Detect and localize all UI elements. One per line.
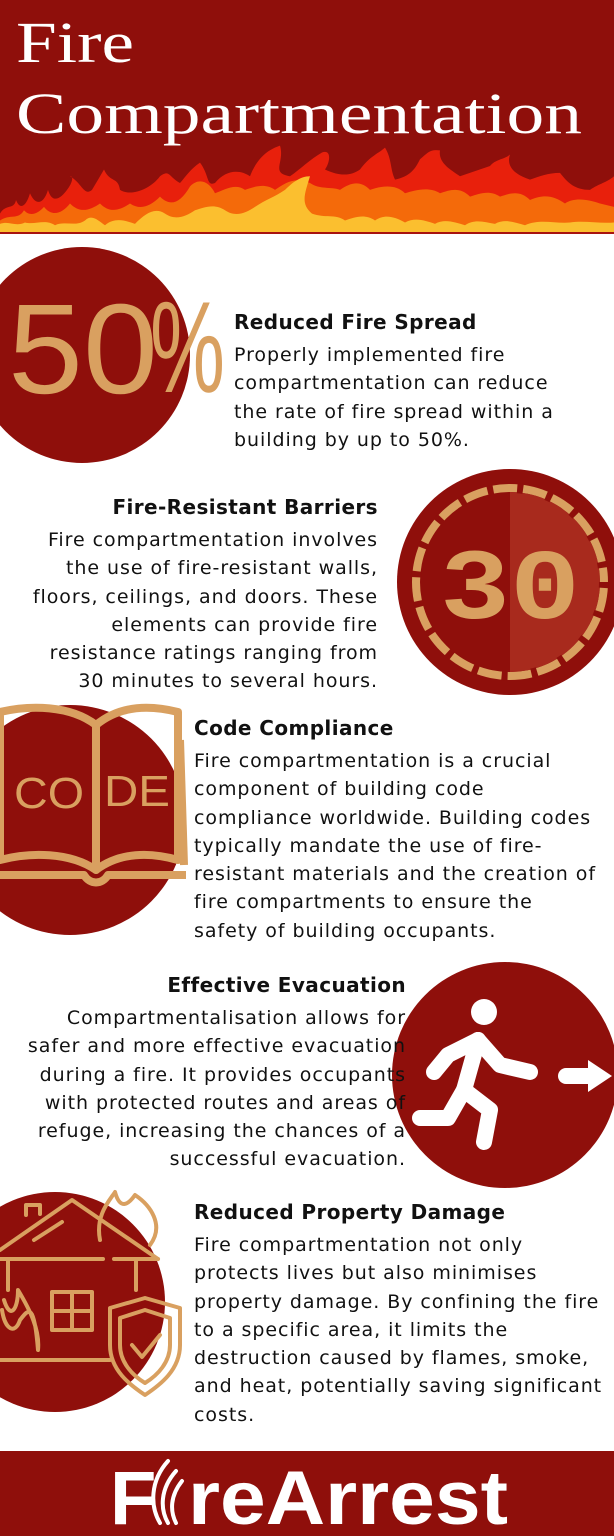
text: effective evacuation: during a fire. It provides occupants xyxy=(40,1064,406,1086)
text: code compliance: compliance worldwide. Building codes xyxy=(194,807,591,829)
text: effective evacuation: safer and more effective evacuation xyxy=(28,1035,406,1057)
header xyxy=(0,0,614,234)
text: fire-resistant barriers xyxy=(33,495,378,692)
text: reduced property damage: Reduced Property Damage xyxy=(194,1200,505,1224)
text: code compliance: typically mandate the use of fire- xyxy=(194,835,542,857)
text: fire-resistant barriers: floors, ceilings, and doors. These xyxy=(33,586,378,608)
title xyxy=(16,10,582,146)
icon: 30 minutes badge xyxy=(397,469,614,695)
title: Compartmentation xyxy=(16,81,582,146)
text: fire-resistant barriers: Fire compartmentation involves xyxy=(48,529,378,551)
icon: code book: DE xyxy=(104,767,170,816)
text: reduced fire spread: Properly implemented fire xyxy=(234,344,505,366)
text: reduced fire spread: building by up to 50%. xyxy=(234,429,470,451)
icon: 30 minutes badge: 30 xyxy=(440,536,580,649)
text: fire-resistant barriers: the use of fire-resistant walls, xyxy=(66,557,378,579)
text: reduced property damage: to a specific area, it limits the xyxy=(194,1319,508,1341)
text: code compliance: component of building code xyxy=(194,778,485,800)
icon: 50% circle xyxy=(0,247,225,463)
text: reduced property damage: destruction caused by flames, smoke, xyxy=(194,1347,589,1369)
icon: 50% circle: % xyxy=(150,274,225,420)
text: effective evacuation: Effective Evacuation xyxy=(167,973,406,997)
icon: 50% circle: 50 xyxy=(8,278,158,421)
text: fire-resistant barriers: resistance ratings ranging from xyxy=(50,642,378,664)
text: reduced fire spread: the rate of fire spread within a xyxy=(234,401,554,423)
flames xyxy=(0,146,614,232)
text: code compliance: Fire compartmentation is a crucial xyxy=(194,750,551,772)
text: fire-resistant barriers: elements can provide fire xyxy=(111,614,378,636)
footer logo xyxy=(0,1451,614,1536)
icon: house with shield xyxy=(0,1192,180,1412)
icon: code book xyxy=(0,705,186,935)
text: effective evacuation: refuge, increasing the chances of a xyxy=(38,1120,406,1142)
text: reduced property damage: costs. xyxy=(194,1404,255,1426)
text: reduced property damage xyxy=(194,1200,602,1426)
text: reduced property damage: Fire compartmentation not only xyxy=(194,1234,523,1256)
text: code compliance: safety of building occupants. xyxy=(194,920,496,942)
text: effective evacuation: Compartmentalisation allows for xyxy=(67,1007,406,1029)
text: code compliance xyxy=(194,716,596,942)
text: effective evacuation: with protected routes and areas of xyxy=(45,1092,406,1114)
text: fire-resistant barriers: Fire-Resistant Barriers xyxy=(112,495,378,519)
text: reduced fire spread: compartmentation can reduce xyxy=(234,372,548,394)
text: effective evacuation: successful evacuation. xyxy=(170,1148,406,1170)
text: code compliance: fire compartments to ensure the xyxy=(194,891,533,913)
text: code compliance: Code Compliance xyxy=(194,716,394,740)
text: fire-resistant barriers: 30 minutes to several hours. xyxy=(78,670,378,692)
icon: code book: CO xyxy=(14,769,84,818)
text: effective evacuation xyxy=(28,973,406,1170)
text: reduced property damage: property damage. By confining the fire xyxy=(194,1291,599,1313)
text: reduced property damage: and heat, potentially saving significant xyxy=(194,1375,602,1397)
text: reduced property damage: protects lives but also minimises xyxy=(194,1262,537,1284)
text: code compliance: resistant materials and the creation of xyxy=(194,863,596,885)
icon: running person xyxy=(392,962,614,1188)
text: reduced fire spread xyxy=(234,310,554,451)
title: Fire xyxy=(16,10,134,75)
text: reduced fire spread: Reduced Fire Spread xyxy=(234,310,477,334)
